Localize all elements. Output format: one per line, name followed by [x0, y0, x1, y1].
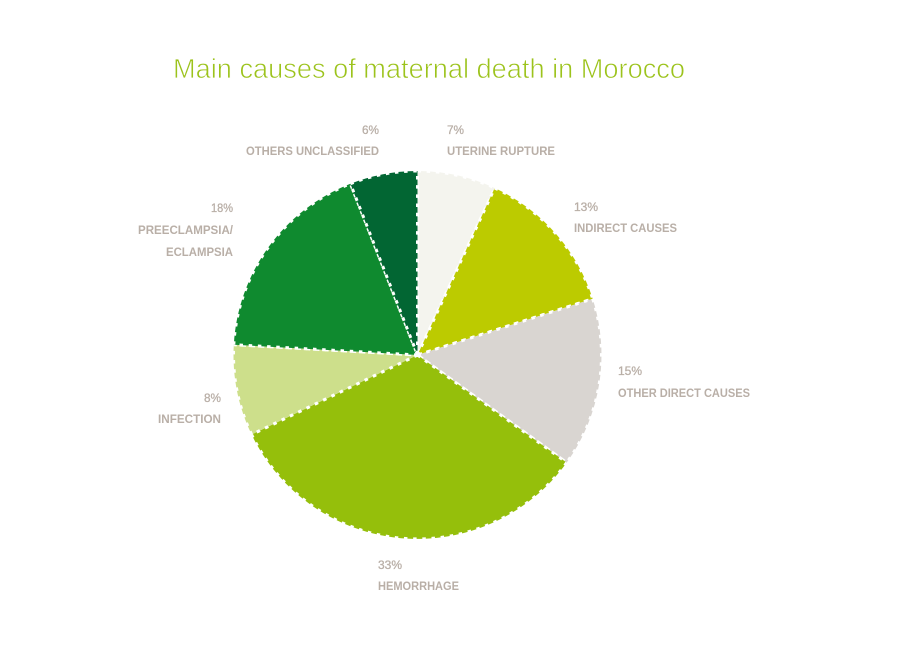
label: others unclassified: OTHERS UNCLASSIFIED — [246, 144, 379, 158]
slice: uterine rupture 7% — [418, 171, 495, 355]
label: other direct causes: OTHER DIRECT CAUSES — [618, 386, 750, 400]
label: uterine rupture: 7% — [447, 123, 464, 137]
label: preeclampsia/eclampsia: PREECLAMPSIA/ — [138, 223, 234, 237]
slice: preeclampsia/eclampsia 18% — [234, 184, 418, 355]
pie chart — [234, 171, 601, 539]
label: preeclampsia/eclampsia: 18% — [211, 201, 233, 215]
slice: others unclassified 6% — [350, 171, 418, 355]
label: others unclassified: 6% — [362, 123, 379, 137]
slice: other direct causes 15% — [418, 299, 601, 463]
label: hemorrhage: 33% — [378, 558, 402, 572]
slice: hemorrhage 33% — [252, 355, 567, 539]
label: other direct causes: 15% — [618, 364, 642, 378]
label: indirect causes: 13% — [574, 200, 598, 214]
title: Main causes of maternal death in Morocco — [173, 53, 685, 84]
label: uterine rupture: UTERINE RUPTURE — [447, 144, 555, 158]
label: infection: INFECTION — [158, 412, 221, 426]
label: others unclassified — [246, 123, 379, 158]
label: indirect causes — [574, 200, 677, 235]
label: infection: 8% — [204, 391, 221, 405]
slice: infection 8% — [234, 345, 418, 434]
label: hemorrhage — [378, 558, 459, 593]
label: infection — [158, 391, 221, 426]
label: preeclampsia/eclampsia: ECLAMPSIA — [166, 245, 233, 259]
label: uterine rupture — [447, 123, 555, 158]
slice: indirect causes 13% — [418, 188, 593, 355]
label: other direct causes — [618, 364, 750, 400]
label: hemorrhage: HEMORRHAGE — [378, 579, 459, 593]
label: preeclampsia/eclampsia — [138, 201, 234, 259]
label: indirect causes: INDIRECT CAUSES — [574, 221, 677, 235]
